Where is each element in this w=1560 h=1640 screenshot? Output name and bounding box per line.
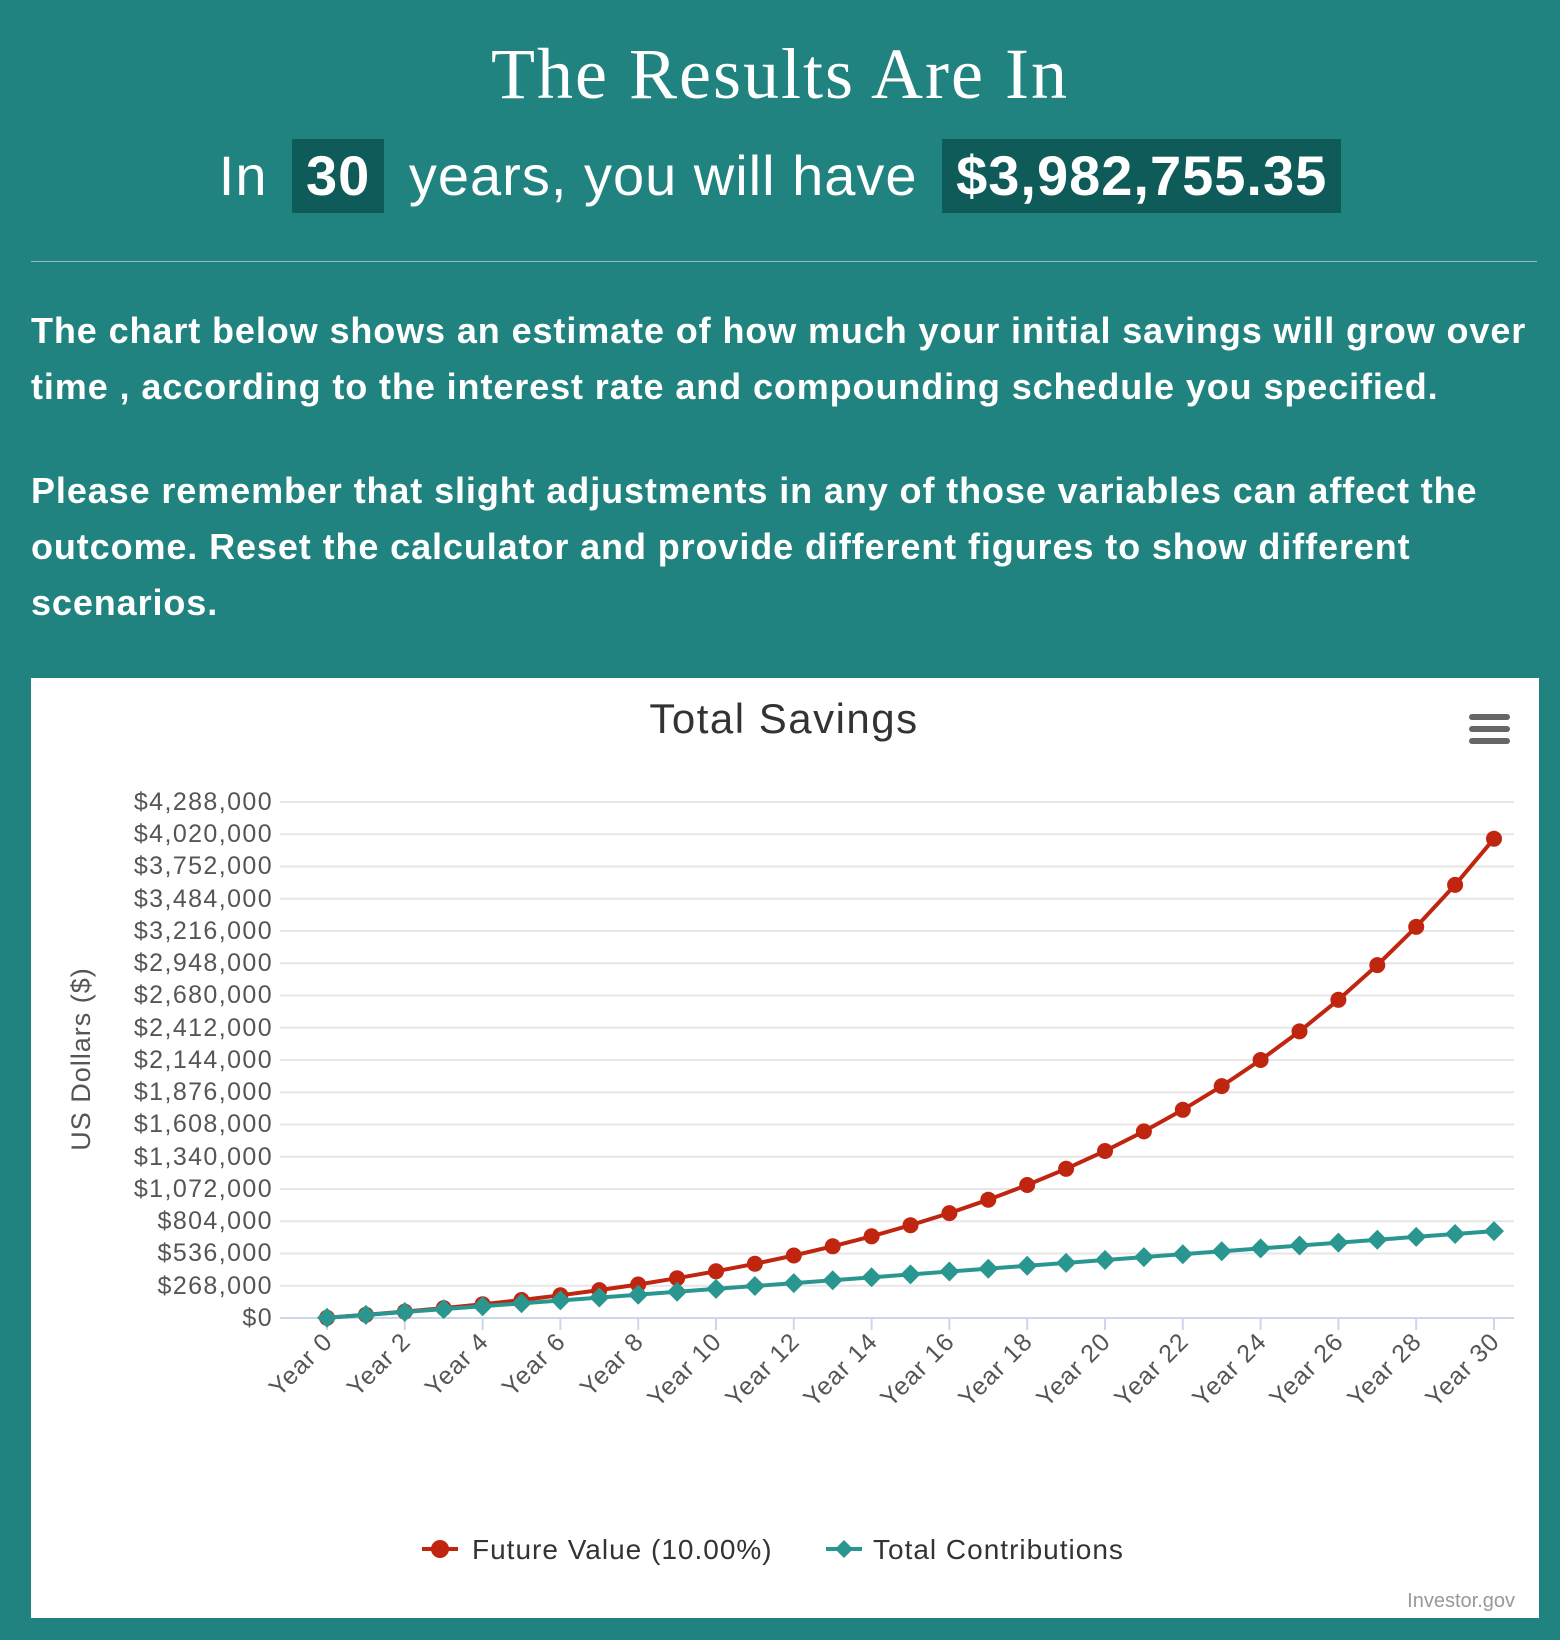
x axis labels: Year 26	[1264, 1327, 1349, 1412]
paragraph 2: Please remember that slight adjustments in any of those variables can affect the	[31, 470, 1477, 511]
paragraph 2	[31, 470, 1477, 623]
x axis labels: Year 22	[1109, 1327, 1194, 1412]
y axis labels: $4,020,000	[134, 820, 273, 848]
y axis labels: $4,288,000	[134, 788, 273, 816]
y axis labels: $804,000	[158, 1207, 273, 1235]
headline result: $3,982,755.35	[956, 144, 1327, 207]
icon: menu	[1472, 717, 1507, 741]
headline result	[219, 139, 1341, 213]
y axis labels: $2,412,000	[134, 1014, 273, 1042]
chart panel	[31, 678, 1539, 1618]
y axis labels: $3,752,000	[134, 852, 273, 880]
y axis labels	[134, 788, 273, 1332]
y axis labels: $2,680,000	[134, 981, 273, 1009]
headline result: In years, you will have	[219, 144, 918, 207]
x axis labels	[264, 1327, 1505, 1412]
legend: Total Contributions	[873, 1534, 1124, 1565]
x axis labels: Year 16	[875, 1327, 960, 1412]
y axis labels: $2,144,000	[134, 1046, 273, 1074]
y axis labels: $3,216,000	[134, 917, 273, 945]
y axis labels: $1,340,000	[134, 1143, 273, 1171]
x axis labels: Year 12	[720, 1327, 805, 1412]
x axis labels: Year 30	[1420, 1327, 1505, 1412]
line: future value	[319, 831, 1502, 1326]
title: The Results Are In	[491, 34, 1069, 114]
y axis title: US Dollars ($)	[66, 967, 96, 1151]
paragraph 1: The chart below shows an estimate of how much your initial savings will grow over	[31, 310, 1526, 351]
y axis labels: $1,608,000	[134, 1110, 273, 1138]
y axis labels: $2,948,000	[134, 949, 273, 977]
legend	[422, 1534, 1124, 1565]
x axis labels: Year 20	[1031, 1327, 1116, 1412]
y axis labels: $1,876,000	[134, 1078, 273, 1106]
x axis labels: Year 14	[798, 1327, 883, 1412]
x axis labels: Year 24	[1187, 1327, 1272, 1412]
x axis labels: Year 2	[342, 1327, 416, 1402]
y axis labels: $268,000	[158, 1272, 273, 1300]
x axis labels: Year 0	[264, 1327, 338, 1402]
x axis labels: Year 8	[575, 1327, 649, 1402]
paragraph 1: time , according to the interest rate and compounding schedule you specified.	[31, 366, 1439, 407]
line: total contributions	[317, 1221, 1504, 1328]
y axis labels: $3,484,000	[134, 885, 273, 913]
x axis labels: Year 6	[497, 1327, 571, 1402]
paragraph 1	[31, 310, 1526, 407]
paragraph 2: scenarios.	[31, 582, 218, 623]
x axis labels: Year 28	[1342, 1327, 1427, 1412]
y axis labels: $0	[242, 1304, 273, 1332]
x axis labels: Year 10	[642, 1327, 727, 1412]
credit: Investor.gov	[1407, 1590, 1515, 1612]
headline result: 30	[306, 144, 370, 207]
y axis labels: $1,072,000	[134, 1175, 273, 1203]
paragraph 2: outcome. Reset the calculator and provide different figures to show different	[31, 526, 1410, 567]
legend: Future Value (10.00%)	[472, 1534, 773, 1565]
x axis labels: Year 4	[420, 1327, 494, 1402]
y axis labels: $536,000	[158, 1239, 273, 1267]
x axis labels: Year 18	[953, 1327, 1038, 1412]
chart title: Total Savings	[649, 695, 919, 742]
